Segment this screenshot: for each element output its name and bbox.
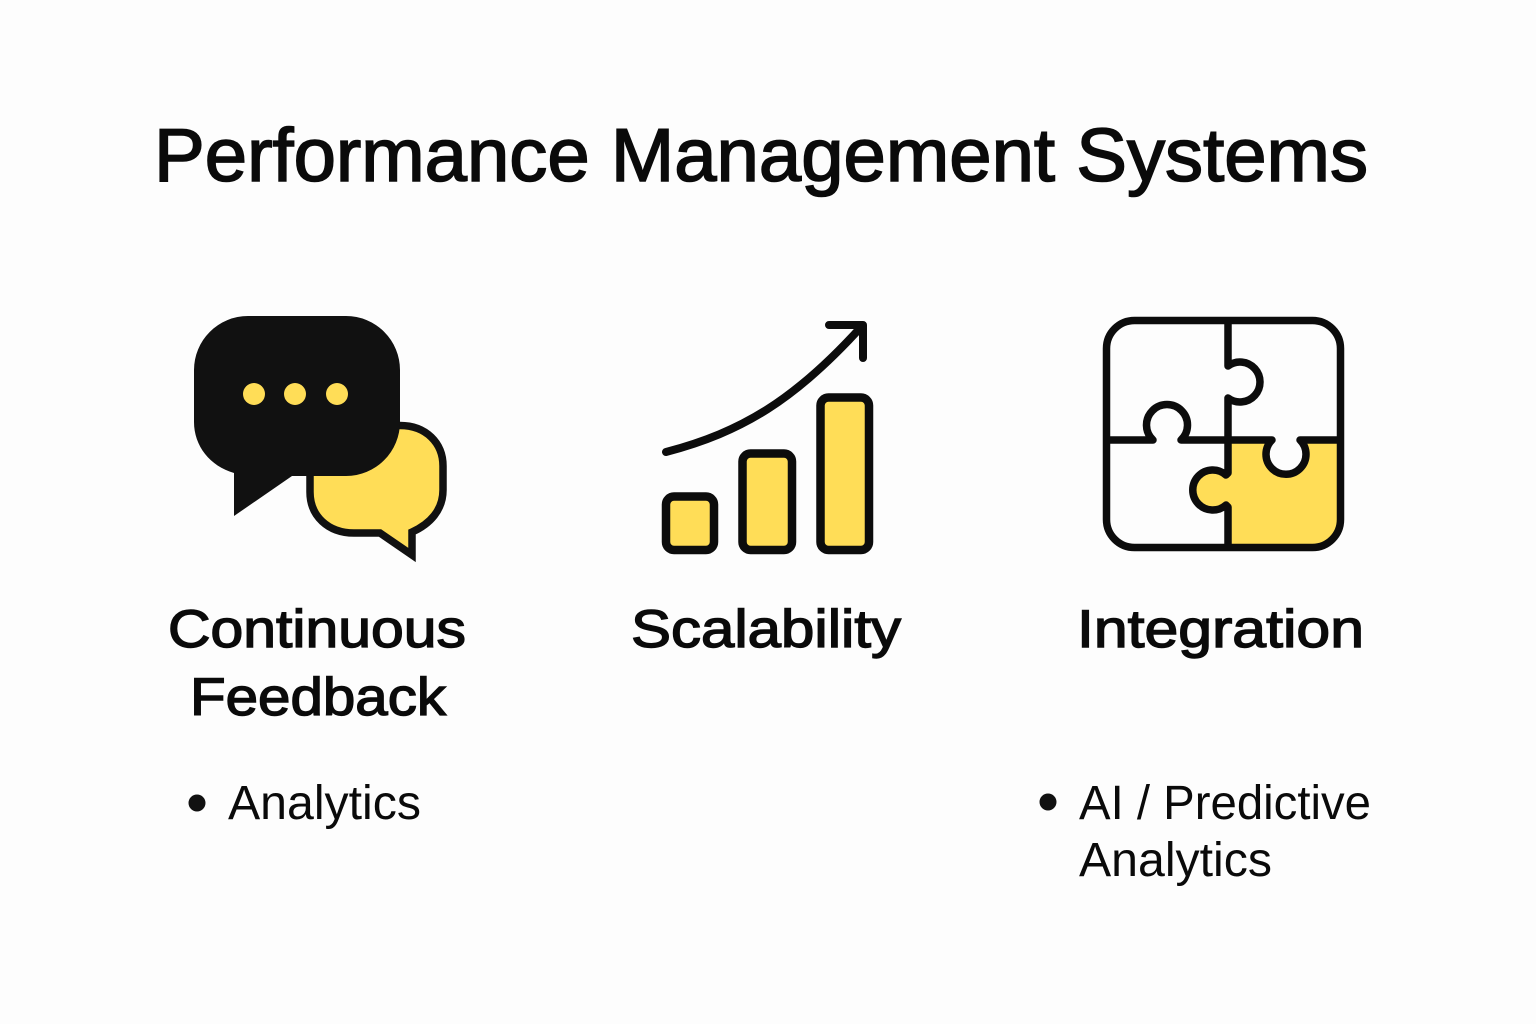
bullet: ai / predictive analytics: Analytics (1079, 834, 1272, 887)
heading: integration: Integration (1077, 600, 1364, 659)
ellipsis dots (243, 383, 348, 405)
title: Performance Management Systems (154, 113, 1368, 197)
bullet: ai / predictive analytics: AI / Predictive (1079, 777, 1371, 830)
heading: continuous feedback: Feedback (190, 668, 447, 727)
puzzle outline (1106, 320, 1340, 548)
icon: growth bar chart (666, 325, 869, 550)
heading: scalability: Scalability (631, 600, 902, 659)
arrow (666, 325, 863, 452)
yellow speech bubble (310, 426, 443, 555)
icon: speech bubbles (194, 316, 443, 555)
heading: continuous feedback (168, 600, 466, 727)
heading: continuous feedback: Continuous (168, 600, 466, 659)
bars (666, 398, 869, 550)
black speech bubble (194, 316, 400, 516)
yellow puzzle piece (1193, 440, 1340, 548)
panel: continuous feedback (168, 316, 466, 830)
bullet: ai / predictive analytics (1040, 777, 1371, 887)
panel: integration (1040, 320, 1371, 887)
icon: puzzle (1106, 320, 1340, 548)
bullet: analytics: Analytics (228, 777, 421, 830)
panel: scalability (631, 325, 902, 659)
